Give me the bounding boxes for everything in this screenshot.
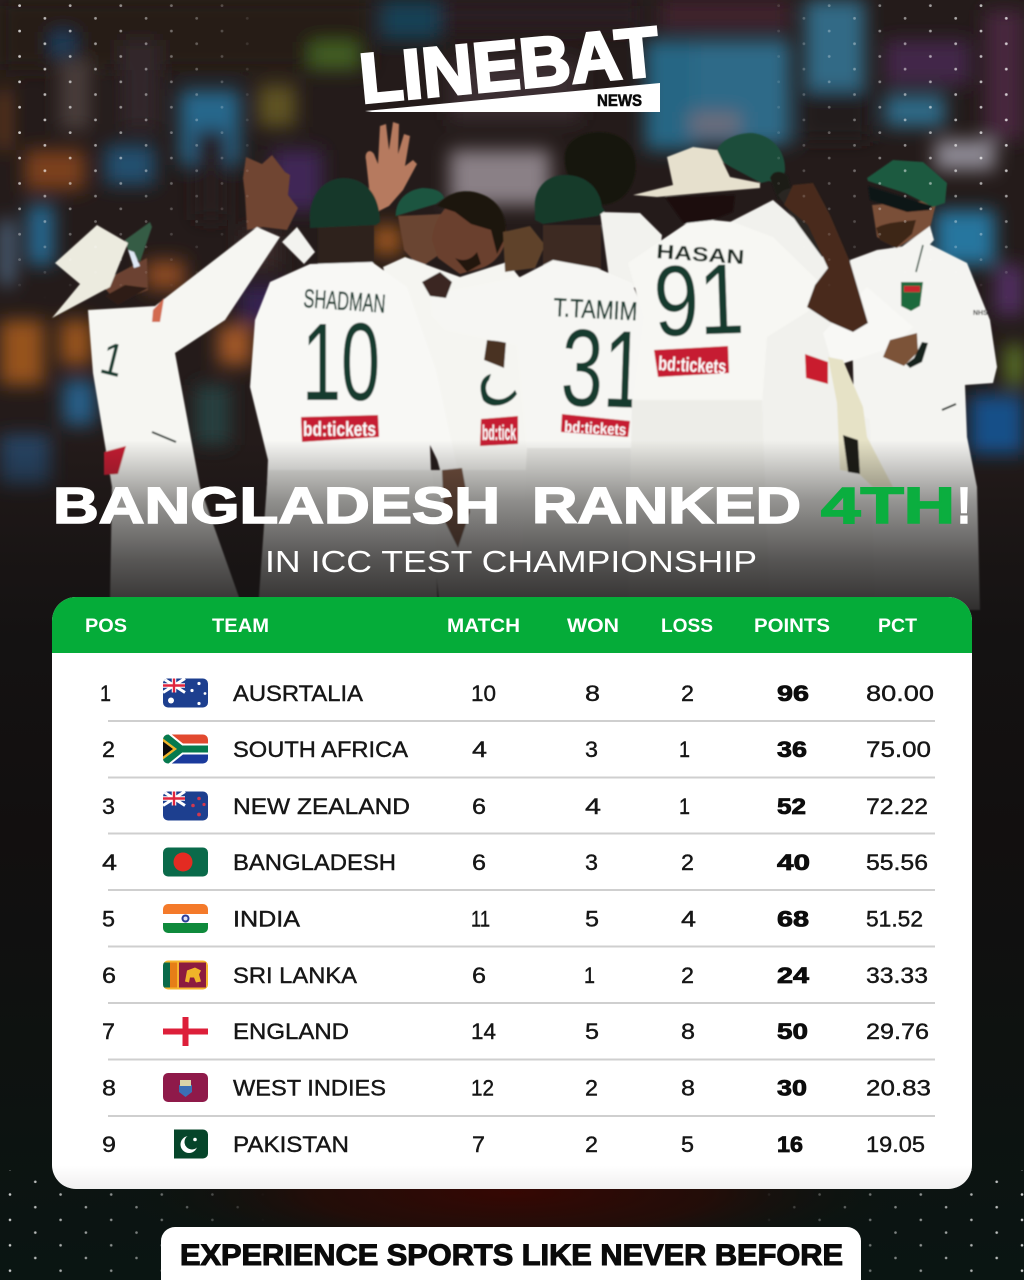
row 7: England: 29.76 (866, 1019, 929, 1044)
player: bearded teammate in centre (432, 191, 545, 368)
row 6: Sri Lanka: 33.33 (866, 963, 928, 988)
row 9: Pakistan: 2 (585, 1132, 598, 1157)
background: blurred stadium crowd (0, 0, 1024, 640)
row 1: Australia: 1 (100, 681, 111, 706)
table card (52, 597, 972, 1189)
row 2: South Africa: 36 (777, 737, 807, 762)
player: T.TAMIM jersey 31: 31 (559, 306, 647, 432)
row 4: Bangladesh: 55.56 (866, 850, 928, 875)
player: HASAN jersey 91 with sun hat (628, 147, 868, 610)
row 8: West Indies: 20.83 (866, 1076, 931, 1100)
player: HASAN jersey 91 with sun hat: 91 (652, 243, 746, 358)
title: Bangladesh ranked 4th: 4TH (821, 477, 955, 534)
row 3: New Zealand (102, 792, 928, 820)
player: right fielder with sunglasses and crest: NHS (973, 310, 988, 317)
table header row: LOSS (661, 616, 713, 637)
row 1: Australia: 8 (585, 681, 600, 706)
player: right fielder with sunglasses and crest (850, 160, 997, 610)
row 2: South Africa: 75.00 (866, 737, 931, 762)
row 5: India: 5 (102, 906, 115, 932)
row 2: South Africa: 1 (679, 737, 690, 762)
row 6: Sri Lanka: 2 (681, 963, 694, 988)
footer tagline pill: EXPERIENCE SPORTS LIKE NEVER BEFORE (180, 1239, 843, 1272)
row 9: Pakistan: 16 (777, 1132, 803, 1157)
decorative dots top corners (0, 0, 1024, 300)
row 1: Australia: 10 (471, 681, 496, 706)
row 5: India: 5 (585, 906, 599, 932)
flag: South Africa (163, 734, 208, 764)
title: Bangladesh ranked 4th: BANGLADESH (53, 477, 500, 534)
row 8: West Indies: 2 (585, 1076, 598, 1100)
player: left fielder with sun hat high-five: 1 (96, 331, 130, 387)
table header row: WON (567, 616, 619, 637)
flag: England (163, 1017, 208, 1046)
player: HASAN jersey 91 with sun hat: bd:tickets (658, 353, 727, 379)
player: curly-haired fielder at back (565, 132, 662, 290)
row 5: India: 51.52 (866, 906, 923, 932)
dark fade over lower photo (0, 440, 1024, 1280)
row 2: South Africa: 3 (585, 737, 598, 762)
row 7: England: ENGLAND (233, 1019, 349, 1044)
table header row: TEAM (212, 616, 269, 637)
row 7: England (102, 1017, 929, 1046)
row 7: England: 14 (471, 1019, 496, 1044)
flag: Australia (163, 678, 208, 708)
row 6: Sri Lanka: 6 (102, 963, 116, 988)
title: Bangladesh ranked 4th: RANKED (532, 477, 801, 534)
row 1: Australia: AUSRTALIA (233, 681, 363, 706)
player: wicketkeeper arm and gloves (823, 287, 928, 487)
row 3: New Zealand: 1 (679, 794, 690, 819)
row 4: Bangladesh: 40 (777, 850, 810, 875)
panel: standings table (52, 597, 972, 1189)
row 5: India: 11 (471, 906, 490, 932)
row 4: Bangladesh: 3 (585, 850, 598, 875)
row 4: Bangladesh: 6 (472, 850, 486, 875)
row 2: South Africa: 4 (472, 737, 487, 762)
flag: Pakistan (174, 1130, 208, 1158)
table header row: PCT (878, 616, 917, 637)
flag: West Indies (163, 1073, 208, 1102)
row 5: India: INDIA (233, 906, 300, 932)
player: SHADMAN jersey 10: bd:tickets (303, 419, 376, 441)
flag: Bangladesh (163, 848, 208, 876)
player: SHADMAN jersey 10 (250, 178, 470, 610)
row 6: Sri Lanka: 24 (777, 963, 810, 988)
player: green-cap teammate and shared jersey mass (383, 188, 530, 610)
row 1: Australia (100, 678, 934, 708)
row 9: Pakistan: 7 (472, 1132, 485, 1157)
row 4: Bangladesh: BANGLADESH (233, 850, 396, 875)
subtitle: IN ICC TEST CHAMPIONSHIP (265, 544, 757, 579)
row 3: New Zealand: 6 (472, 794, 486, 819)
row 8: West Indies: 12 (471, 1076, 494, 1100)
row 8: West Indies: 30 (777, 1076, 807, 1100)
players group photo (52, 122, 997, 610)
row 2: South Africa: 2 (102, 737, 115, 762)
row 6: Sri Lanka: SRI LANKA (233, 963, 357, 988)
row 9: Pakistan: 5 (681, 1132, 694, 1157)
player: green-cap teammate and shared jersey mass: bd:tick (482, 422, 516, 445)
player: T.TAMIM jersey 31: bd:tickets (564, 419, 627, 439)
player: left fielder with sun hat high-five (52, 155, 298, 600)
player: raised hand and sleeve at left (282, 122, 417, 264)
row 8: West Indies (102, 1073, 931, 1102)
row 7: England: 8 (681, 1019, 695, 1044)
row 6: Sri Lanka (102, 960, 928, 990)
row 4: Bangladesh (102, 848, 928, 876)
row 3: New Zealand: 4 (585, 794, 601, 819)
row 3: New Zealand: 52 (777, 794, 806, 819)
row 8: West Indies: 8 (102, 1076, 116, 1100)
decorative dots bottom corners (0, 1170, 1024, 1280)
player: SHADMAN jersey 10: 10 (302, 301, 380, 424)
row 3: New Zealand: 72.22 (866, 794, 928, 819)
row 1: Australia: 2 (681, 681, 694, 706)
player: behind, jersey partly hidden with cap (716, 133, 875, 610)
table header row: POINTS (754, 616, 830, 637)
logo: LINEBAT NEWS: LINEBAT (356, 12, 662, 118)
flag: New Zealand (163, 792, 208, 820)
player: HASAN jersey 91 with sun hat: HASAN (656, 241, 745, 269)
row 3: New Zealand: 3 (102, 794, 115, 819)
row 4: Bangladesh: 4 (102, 850, 117, 875)
row 6: Sri Lanka: 6 (472, 963, 486, 988)
row 6: Sri Lanka: 1 (584, 963, 595, 988)
table header row: MATCH (447, 616, 520, 637)
row 9: Pakistan: PAKISTAN (233, 1132, 349, 1157)
row 5: India: 68 (777, 906, 809, 932)
row 3: New Zealand: NEW ZEALAND (233, 794, 410, 819)
flag: India (163, 904, 208, 933)
logo: LINEBAT NEWS: NEWS (597, 91, 642, 110)
row 8: West Indies: WEST INDIES (233, 1076, 386, 1100)
row 9: Pakistan (102, 1130, 925, 1158)
row 5: India (102, 904, 923, 933)
table header row: POS (85, 616, 127, 637)
flag: Sri Lanka (163, 960, 208, 990)
row 7: England: 7 (102, 1019, 115, 1044)
player: T.TAMIM jersey 31 (422, 175, 650, 610)
title: Bangladesh ranked 4th (53, 477, 971, 534)
row 7: England: 5 (585, 1019, 599, 1044)
title: Bangladesh ranked 4th: ! (957, 477, 971, 534)
row 9: Pakistan: 9 (102, 1132, 116, 1157)
row 2: South Africa: SOUTH AFRICA (233, 737, 408, 762)
row 7: England: 50 (777, 1019, 808, 1044)
row 1: Australia: 80.00 (866, 681, 934, 706)
row 2: South Africa (102, 734, 931, 764)
row 1: Australia: 96 (777, 681, 809, 706)
footer tagline pill (161, 1227, 861, 1280)
row 8: West Indies: 8 (681, 1076, 695, 1100)
player: T.TAMIM jersey 31: T.TAMIM (553, 292, 638, 326)
table header row (52, 597, 972, 653)
player: SHADMAN jersey 10: SHADMAN (303, 283, 386, 319)
row 5: India: 4 (681, 906, 696, 932)
row 4: Bangladesh: 2 (681, 850, 694, 875)
row 9: Pakistan: 19.05 (866, 1132, 925, 1157)
